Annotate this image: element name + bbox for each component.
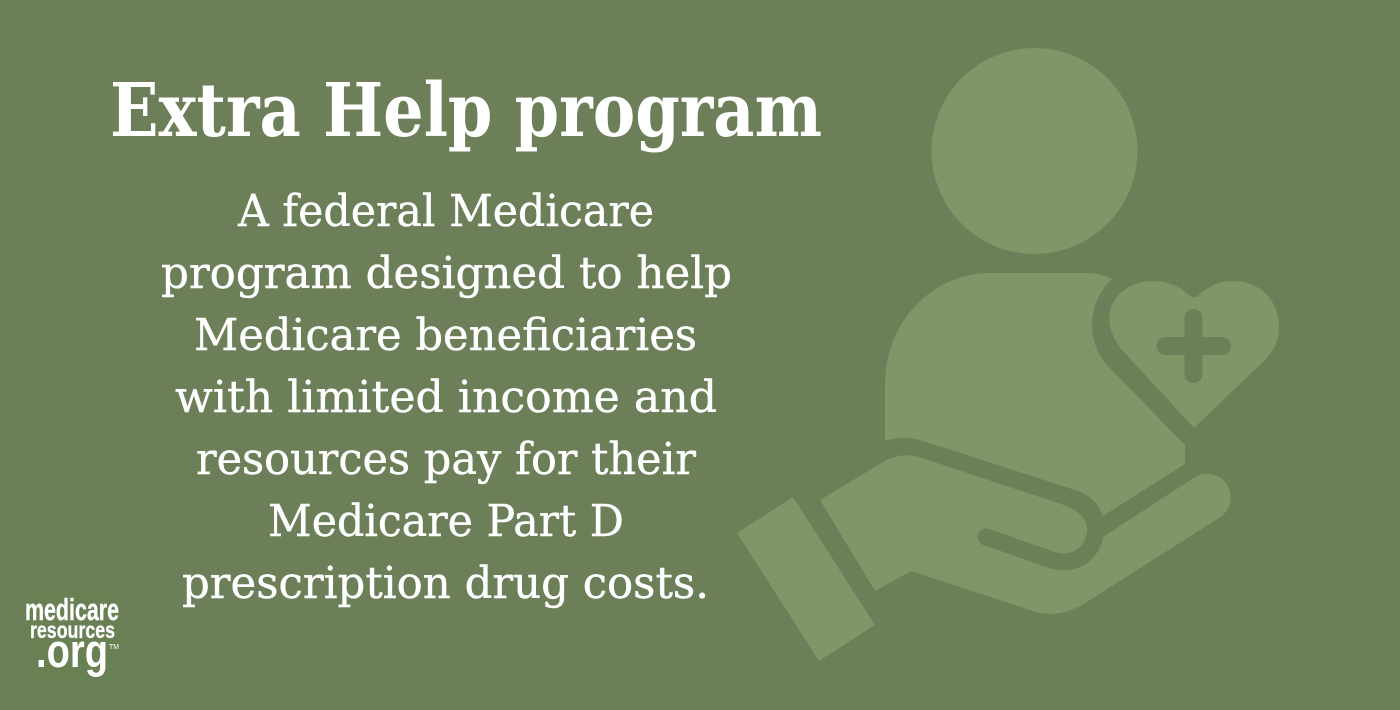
logo: medicareresources.org: medicare (25, 592, 119, 627)
icon: open hand (820, 455, 1231, 614)
icon: person with heart held in a hand (737, 48, 1279, 661)
description text: prescription drug costs. (182, 558, 709, 609)
logo: medicareresources.org: .org (36, 624, 108, 677)
title: Extra Help program (110, 68, 822, 154)
icon: heart with plus (1109, 281, 1279, 428)
icon: sleeve cuff (737, 497, 875, 661)
description text (161, 186, 732, 609)
logo: medicareresources.org (21, 586, 123, 686)
logo: medicareresources.org: resources (30, 617, 115, 643)
description text: with limited income and (175, 372, 717, 423)
description text: resources pay for their (196, 434, 697, 485)
icon: body (885, 273, 1185, 516)
description text: Medicare Part D (268, 496, 624, 547)
icon: head (932, 48, 1138, 254)
description text: A federal Medicare (237, 186, 654, 237)
description text: Medicare beneficiaries (194, 310, 697, 361)
logo: medicareresources.org: TM (109, 644, 119, 651)
description text: program designed to help (161, 248, 732, 299)
